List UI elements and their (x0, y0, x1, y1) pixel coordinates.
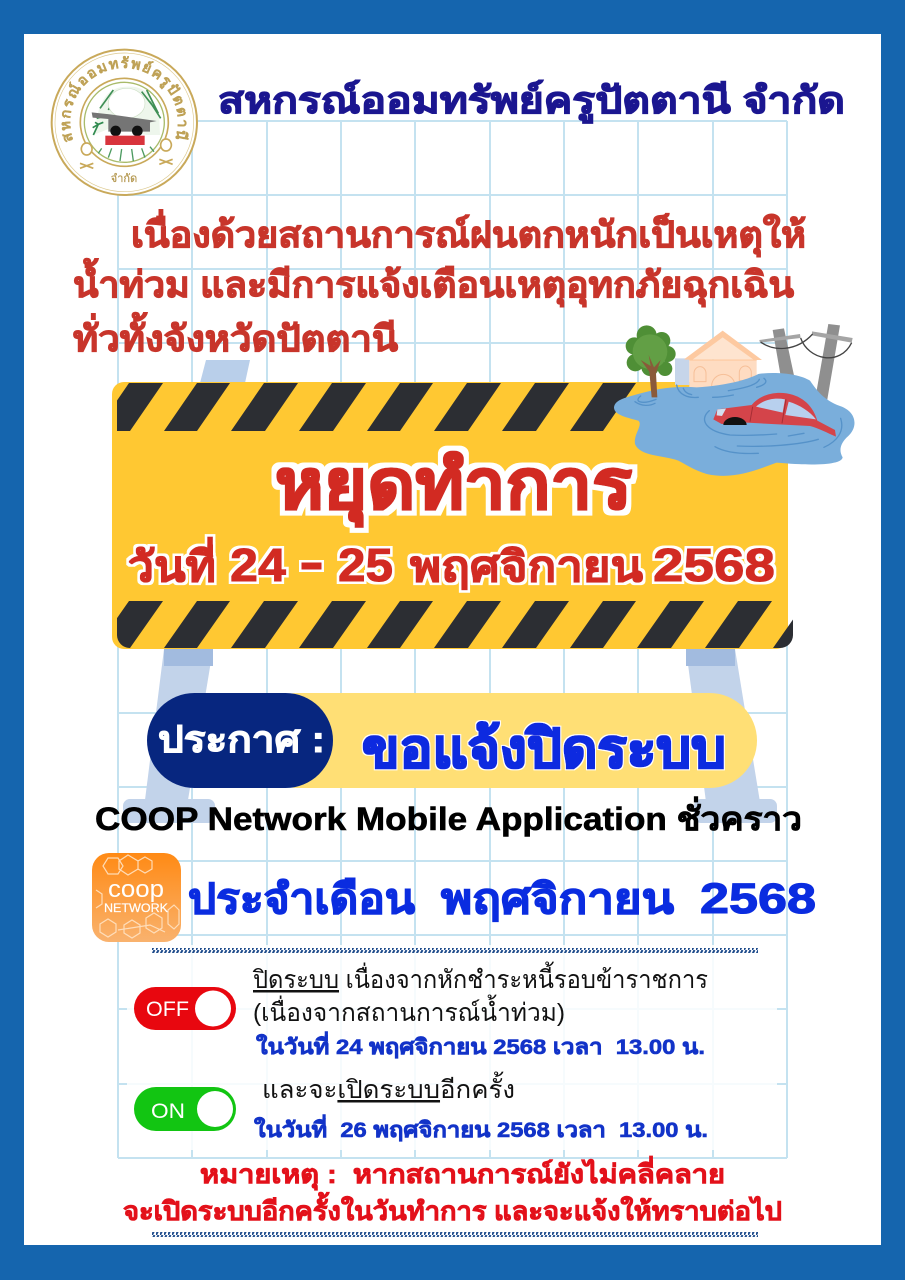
hazard stripes (96, 383, 840, 648)
sinking car (713, 393, 836, 437)
announce label (147, 693, 333, 788)
month heading: 2568 (700, 875, 816, 923)
house (675, 331, 762, 390)
utility poles (759, 324, 853, 403)
month heading: ประจำเดือน (188, 876, 415, 922)
closure detail text: ปิดระบบ เนื่องจากหักชำระหนี้รอบข้าราชการ (252, 961, 708, 994)
flood water (614, 373, 854, 476)
barricade legs (123, 360, 777, 823)
closure dates: 24 (230, 539, 286, 591)
closure dates: พฤศจิกายน (410, 543, 643, 590)
closure detail text (252, 961, 708, 1059)
logo: cooperative seal (52, 50, 197, 195)
closure dates (128, 537, 775, 591)
background grid (118, 121, 787, 1158)
on toggle (134, 1087, 236, 1131)
remark (123, 1155, 782, 1226)
announcement paragraph (73, 209, 806, 359)
app icon: coop (108, 876, 164, 903)
closure dates: 2568 (653, 539, 775, 591)
month heading: พฤศจิกายน (441, 876, 674, 922)
app notice line: COOP Network Mobile Application ชั่วคราว (95, 796, 802, 837)
reopening detail text: และจะเปิดระบบอีกครั้ง (262, 1071, 515, 1104)
flood illustration (614, 324, 854, 476)
closure dates: 25 (338, 539, 393, 591)
app icon: NETWORK (104, 901, 168, 915)
bottom dashed rule (152, 1232, 758, 1237)
tree (626, 325, 676, 397)
top dashed rule (152, 948, 758, 953)
announcement paragraph: ทั่วทั้งจังหวัดปัตตานี (73, 312, 398, 359)
off toggle: OFF (146, 998, 189, 1021)
grid fade panel behind details (127, 945, 777, 1150)
on toggle: ON (151, 1100, 185, 1123)
app icon (92, 853, 181, 942)
remark: หมายเหตุ : หากสถานการณ์ยังไม่คลี่คลาย (200, 1155, 725, 1191)
logo ring text: สหกรณ์ออมทรัพย์ครูปัตตานี (62, 56, 189, 142)
reopening detail text (254, 1071, 708, 1142)
announcement paragraph: น้ำท่วม และมีการแจ้งเตือนเหตุอุทกภัยฉุกเฉิน (73, 258, 794, 308)
off toggle (134, 987, 236, 1030)
month heading (188, 875, 816, 923)
title: สหกรณ์ออมทรัพย์ครูปัตตานี จำกัด (218, 80, 845, 124)
water ripples (635, 378, 842, 454)
announcement paragraph: เนื่องด้วยสถานการณ์ฝนตกหนักเป็นเหตุให้ (131, 209, 806, 258)
remark: จะเปิดระบบอีกครั้งในวันทำการ และจะแจ้งให้ทราบต่อไป (123, 1191, 782, 1226)
closure detail text: (เนื่องจากสถานการณ์น้ำท่วม) (253, 994, 565, 1027)
barricade board (96, 382, 840, 649)
closure dates: วันที่ (128, 537, 216, 590)
reopening detail text: ในวันที่ 26 พฤศจิกายน 2568 เวลา 13.00 น. (254, 1114, 708, 1142)
system closure headline: ขอแจ้งปิดระบบ (362, 720, 726, 779)
announcement pill (147, 693, 757, 788)
closure heading: หยุดทำการ (275, 447, 633, 527)
logo bottom text: จำกัด (111, 173, 137, 185)
announce label text: ประกาศ : (158, 719, 325, 760)
closure detail text: ในวันที่ 24 พฤศจิกายน 2568 เวลา 13.00 น. (256, 1031, 705, 1059)
